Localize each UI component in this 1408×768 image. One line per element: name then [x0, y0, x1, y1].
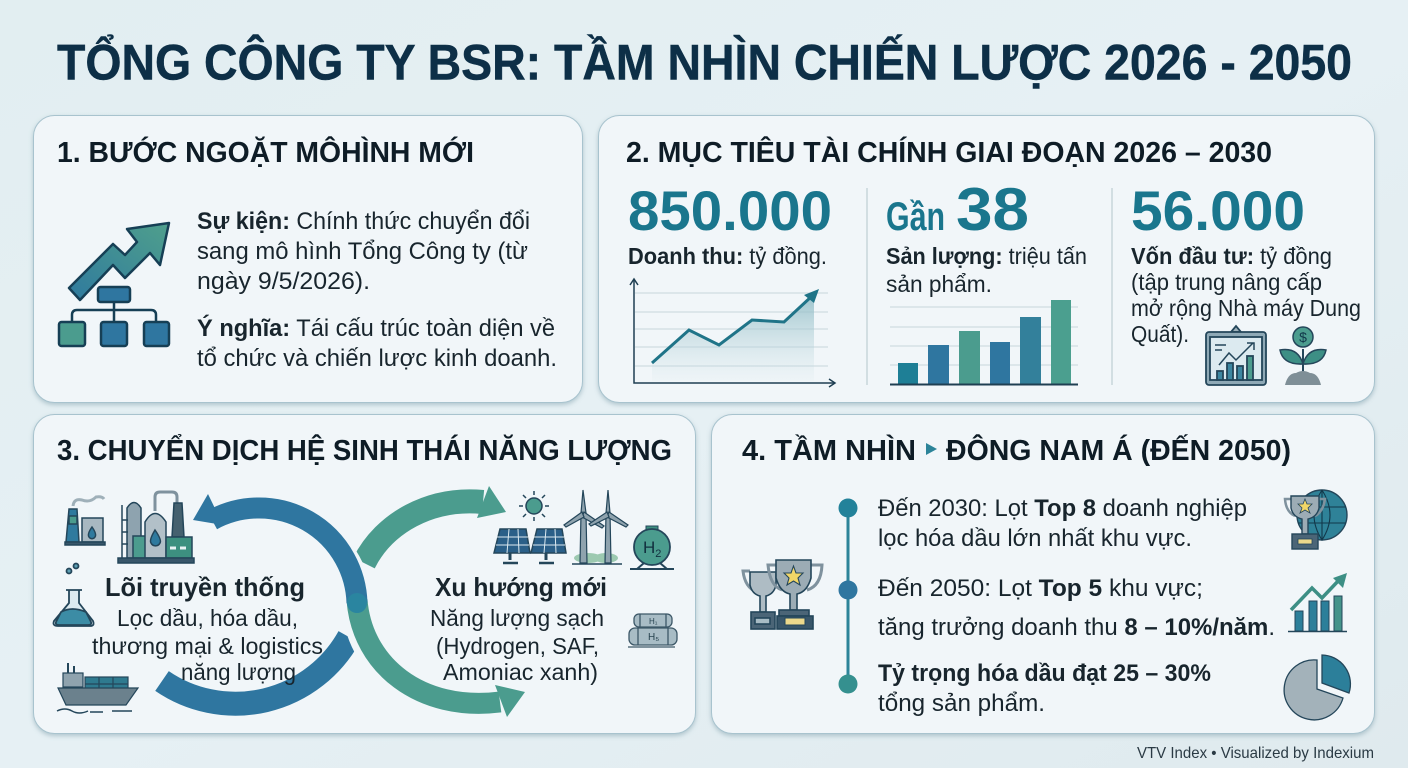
- icon: hydrogen cylinders: H₁: [649, 617, 658, 626]
- event text: [197, 208, 530, 295]
- panel: energy ecosystem: [34, 414, 696, 734]
- icon: sun: [519, 491, 549, 521]
- divider: [867, 188, 1112, 385]
- timeline: [838, 498, 858, 694]
- new trend text: [430, 572, 607, 685]
- event text: ngày 9/5/2026).: [197, 268, 370, 295]
- stat: revenue: Doanh thu: tỷ đồng.: [628, 243, 827, 269]
- stat: investment: [1131, 179, 1361, 347]
- icon: growth arrow above org chart: [59, 223, 169, 346]
- new trend text: (Hydrogen, SAF,: [436, 633, 599, 659]
- traditional core text: thương mại & logistics: [92, 633, 323, 659]
- stat: output: 38: [956, 176, 1029, 243]
- stat: output: Gần: [886, 195, 945, 239]
- panel heading: ĐÔNG NAM Á (ĐẾN 2050): [946, 433, 1291, 467]
- icon: hydrogen tank: 2: [655, 548, 661, 560]
- icon: small refinery: [65, 497, 105, 545]
- milestone petrochemical share: Tỷ trọng hóa dầu đạt 25 – 30%: [878, 660, 1211, 687]
- panel heading: 1. BƯỚC NGOẶT MÔHÌNH MỚI: [57, 135, 474, 169]
- milestone 2030: lọc hóa dầu lớn nhất khu vực.: [878, 525, 1192, 552]
- new trend text: Năng lượng sạch: [430, 605, 604, 631]
- stat: output: Sản lượng: triệu tấn: [886, 243, 1087, 269]
- icon: hydrogen cylinders: H₅: [648, 632, 659, 643]
- new trend text: Amoniac xanh): [443, 659, 598, 685]
- milestone 2050: tăng trưởng doanh thu 8 – 10%/năm.: [878, 614, 1275, 641]
- milestone 2030: Đến 2030: Lọt Top 8 doanh nghiệp: [878, 495, 1247, 522]
- panel card: [712, 414, 1374, 734]
- milestone 2050: Đến 2050: Lọt Top 5 khu vực;: [878, 575, 1203, 602]
- source credit: VTV Index • Visualized by Indexium: [1137, 745, 1374, 762]
- panel: financial targets: [598, 116, 1374, 402]
- stat: output: [886, 176, 1087, 297]
- icon: solar panels: [494, 529, 566, 563]
- milestone 2030: [878, 495, 1247, 552]
- icon: pie chart: [1284, 655, 1350, 720]
- milestone 2050: [878, 575, 1275, 641]
- icon: hydrogen tank: [630, 526, 674, 569]
- event text: Sự kiện: Chính thức chuyển đổi: [197, 208, 530, 235]
- traditional core text: Lõi truyền thống: [105, 572, 305, 602]
- line chart: revenue: [630, 279, 835, 387]
- icon: flask: [54, 564, 94, 626]
- traditional core text: [92, 572, 323, 685]
- icon: growth bars: [1288, 573, 1347, 632]
- panel heading: 2. MỤC TIÊU TÀI CHÍNH GIAI ĐOẠN 2026 – 2030: [626, 135, 1272, 169]
- icon: large refinery: [118, 492, 194, 563]
- stat: investment: 56.000: [1131, 179, 1305, 242]
- icon: hydrogen tank: H: [643, 538, 655, 557]
- traditional core text: năng lượng: [181, 659, 296, 685]
- milestone petrochemical share: tổng sản phẩm.: [878, 690, 1045, 717]
- meaning text: tổ chức và chiến lược kinh doanh.: [197, 345, 557, 372]
- icon: trophy and globe: [1285, 490, 1347, 549]
- panel card: [34, 414, 696, 734]
- stat: investment: mở rộng Nhà máy Dung: [1131, 295, 1361, 321]
- stat: revenue: [628, 179, 832, 269]
- panel heading: 3. CHUYỂN DỊCH HỆ SINH THÁI NĂNG LƯỢNG: [57, 433, 672, 467]
- panel heading: 4. TẦM NHÌN: [742, 433, 916, 467]
- stat: investment: (tập trung nâng cấp: [1131, 269, 1322, 295]
- stat: output: sản phẩm.: [886, 271, 992, 297]
- icon: hydrogen cylinders: [628, 614, 677, 647]
- stat: investment: Quất).: [1131, 321, 1189, 347]
- panel heading: [742, 433, 1291, 467]
- icon: wind turbines: [564, 490, 628, 564]
- stat: revenue: 850.000: [628, 179, 832, 242]
- icon: trophies: [743, 560, 822, 629]
- traditional core text: Lọc dầu, hóa dầu,: [117, 605, 298, 631]
- icon: cargo ship: [57, 663, 138, 713]
- milestone petrochemical share: [878, 660, 1211, 717]
- icon: money plant: [1280, 327, 1326, 385]
- panel card: [34, 116, 582, 402]
- panel: turning point: [34, 116, 582, 402]
- meaning text: Ý nghĩa: Tái cấu trúc toàn diện về: [197, 314, 555, 342]
- panel: southeast asia vision: [712, 414, 1374, 734]
- stat: investment: Vốn đầu tư: tỷ đồng: [1131, 243, 1332, 269]
- new trend text: Xu hướng mới: [435, 572, 607, 602]
- panel card: [598, 116, 1374, 402]
- cycle arrows: [162, 486, 525, 717]
- bar chart: output: [890, 300, 1078, 384]
- icon: money plant: $: [1299, 329, 1307, 345]
- meaning text: [197, 314, 557, 372]
- icon: chart board: [1206, 326, 1266, 385]
- event text: sang mô hình Tổng Công ty (từ: [197, 238, 528, 265]
